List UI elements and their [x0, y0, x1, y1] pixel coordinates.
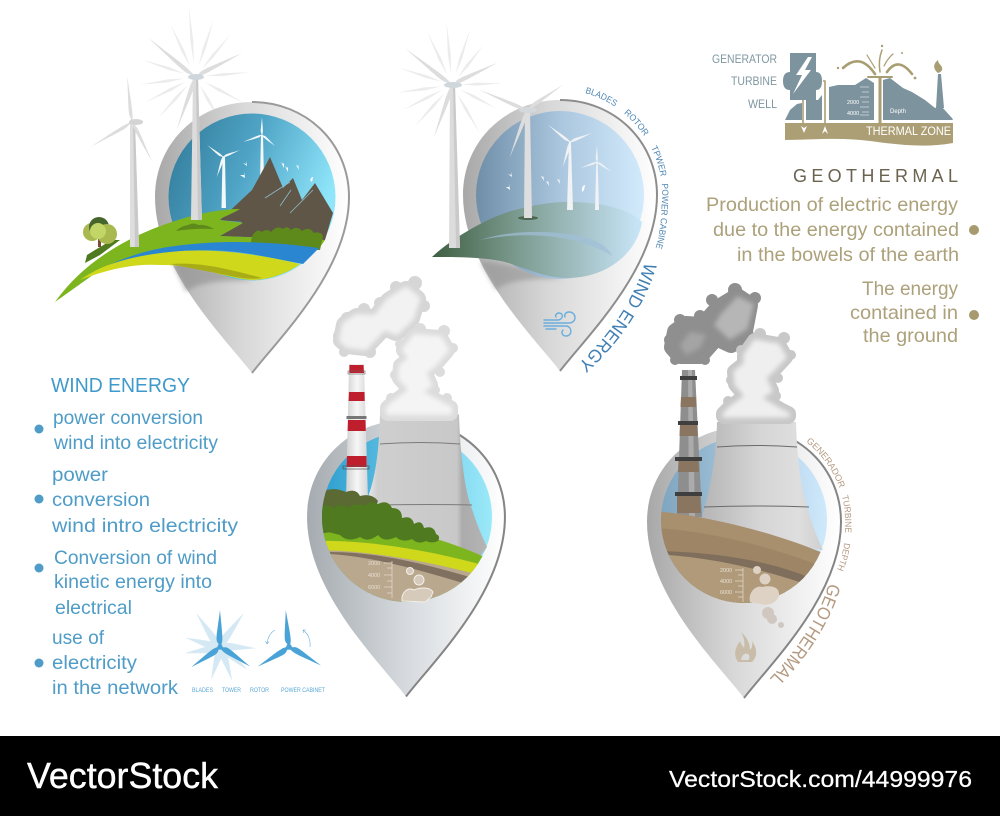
- sky circle: [322, 432, 492, 602]
- sky circle: [476, 111, 644, 279]
- pin body: [307, 420, 505, 697]
- text block: energy in the ground: the ground: [863, 325, 958, 347]
- ribbon shadow on pin: [172, 262, 252, 292]
- text block: wind list: electricity: [52, 652, 137, 674]
- smoke from cooling tower: [386, 323, 458, 413]
- light band on hill: [480, 232, 612, 256]
- depth scale: 4000: [720, 579, 732, 585]
- ribbon shadow on pin: [480, 262, 562, 290]
- rotor rays: [397, 23, 502, 133]
- text block: energy in the ground: The energy: [862, 278, 958, 300]
- icon: rotor diagrams: BLADES: [192, 687, 213, 694]
- land silhouette: [785, 74, 953, 120]
- ground layers: [322, 489, 482, 602]
- bushes: [250, 227, 323, 250]
- pin body: [647, 427, 841, 698]
- depth labels: 2000: [847, 100, 859, 106]
- depth labels: 4000: [847, 111, 859, 117]
- icon: rotor diagrams: [184, 610, 325, 694]
- thermal zone label: THERMAL ZONE: [866, 126, 951, 138]
- cooling tower: [350, 414, 487, 570]
- footer bar: [0, 736, 1000, 816]
- generator box: [783, 53, 822, 100]
- text block: wind list: power: [52, 464, 109, 486]
- depth labels: [847, 100, 906, 117]
- text block: wind list: Conversion of wind: [54, 547, 217, 569]
- curved labels: GENERADOR: [808, 438, 844, 488]
- thermal band: [785, 123, 953, 146]
- text block: wind list: conversion: [52, 489, 150, 511]
- depth scale: 4000: [368, 573, 380, 579]
- smoke from chimney: [664, 283, 761, 365]
- text block: wind list: kinetic energy into: [54, 571, 212, 593]
- text block: energy in the ground: contained in: [850, 302, 958, 324]
- sky circle: [661, 437, 827, 603]
- turbine large: [147, 36, 243, 220]
- pin body: [463, 100, 657, 371]
- heading: wind energy: WIND ENERGY: [51, 374, 190, 397]
- birds: [240, 161, 313, 182]
- far turbines: [547, 124, 613, 210]
- text block: wind list: in the network: [52, 677, 178, 699]
- hill: [432, 202, 642, 278]
- curved title: WIND ENERGY: [581, 265, 657, 373]
- ground layers: [661, 512, 820, 603]
- curved labels: [808, 438, 852, 571]
- panel: geothermal diagram: [712, 45, 953, 146]
- icon: rotor diagrams: TOWER: [222, 687, 241, 694]
- text block: energy in the ground: [850, 278, 979, 347]
- sky circle: [168, 114, 336, 280]
- curved labels: TURBINE: [842, 494, 852, 532]
- depth labels: Depth: [890, 109, 906, 115]
- turbine left: [90, 76, 154, 247]
- depth scale: 2000: [720, 568, 732, 574]
- chimney: [675, 370, 702, 517]
- turbine middle: [478, 83, 564, 220]
- birds: [506, 172, 585, 192]
- labels: WELL: [748, 99, 778, 111]
- text block: wind list: [34, 407, 238, 699]
- magma blobs: [402, 568, 433, 602]
- panel: geothermal pin pale: [647, 283, 852, 698]
- panel: wind energy pin pale: [400, 26, 668, 373]
- text block: geothermal description: [706, 194, 979, 266]
- turbine large: [403, 47, 499, 248]
- rotor rays behind big turbine: [140, 7, 250, 121]
- smoke from chimney: [333, 276, 430, 358]
- footer logo: VectorStock: [27, 755, 219, 796]
- icon: flame: [735, 632, 756, 662]
- smoke from cooling tower: [723, 328, 796, 416]
- yellow field: [80, 250, 300, 280]
- river: [95, 242, 319, 272]
- curved labels: ROTOR: [624, 109, 648, 136]
- icon: rotor diagrams: ROTOR: [250, 687, 269, 694]
- cooling tower: [700, 422, 823, 550]
- footer reference: VectorStock.com/44999976: [669, 766, 972, 792]
- curved labels: DEPTH: [837, 543, 850, 571]
- depth scale: [368, 561, 380, 591]
- labels: [712, 54, 778, 111]
- geyser: [843, 50, 912, 123]
- tree: [83, 217, 120, 263]
- lightning: [793, 57, 812, 94]
- text block: geothermal description: in the bowels of the earth: [737, 244, 959, 266]
- pipes: [803, 81, 825, 124]
- depth scale: 6000: [720, 590, 732, 596]
- curved labels: BLADES: [586, 87, 618, 106]
- derrick flame: [934, 60, 942, 73]
- curved title: GEOTHERMAL: [770, 585, 840, 683]
- icon: rotor diagrams: POWER CABINET: [281, 687, 325, 694]
- text block: wind list: power conversion: [53, 407, 203, 429]
- curved labels: [586, 87, 668, 250]
- text block: wind list: wind into electricity: [53, 432, 218, 454]
- depth scale: [720, 568, 732, 596]
- magma blobs: [750, 566, 779, 605]
- icon: wind: [544, 312, 575, 336]
- heading: geothermal: GEOTHERMAL: [793, 166, 958, 186]
- panel: wind energy pin colour: [55, 7, 349, 373]
- text block: geothermal description: Production of electric energy: [706, 194, 958, 216]
- mountains: [220, 157, 333, 240]
- depth scale: 2000: [368, 561, 380, 567]
- green hill: [55, 209, 325, 302]
- labels: GENERATOR: [712, 54, 777, 66]
- curved labels: TPWER: [652, 145, 666, 176]
- panel: power plant pin colour: [307, 276, 505, 697]
- text block: geothermal description: due to the energy contained: [713, 219, 959, 241]
- text block: wind list: wind intro electricity: [51, 515, 238, 537]
- text block: wind list: use of: [52, 627, 105, 649]
- inner turbines: [206, 117, 276, 208]
- chimney: [343, 364, 369, 500]
- pin body: [155, 102, 349, 373]
- depth scale: 6000: [368, 585, 380, 591]
- text block: wind list: electrical: [55, 597, 132, 619]
- labels: TURBINE: [731, 76, 777, 88]
